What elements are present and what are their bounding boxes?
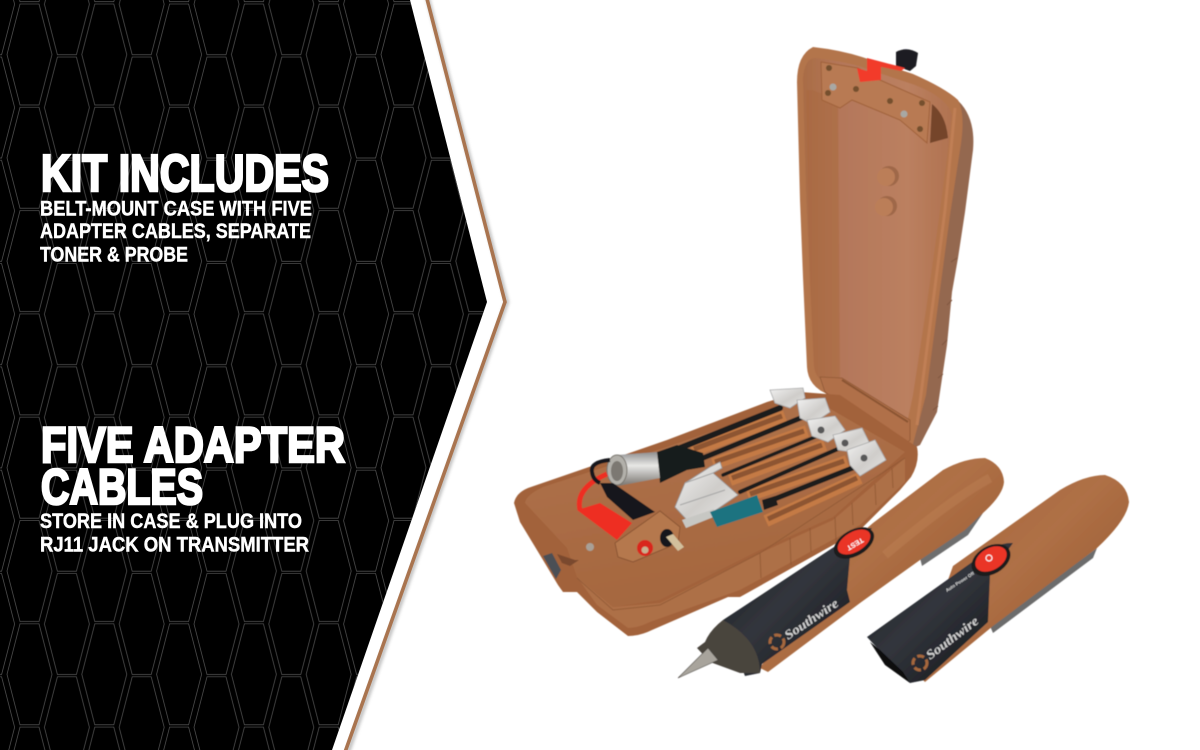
transmitter brand: Southwire	[923, 613, 982, 662]
text: five adapter cables description: RJ11 JACK ON TRANSMITTER	[40, 534, 309, 556]
test button: TEST	[845, 536, 864, 551]
heading: five adapter cables	[41, 417, 345, 515]
probe brown body	[760, 458, 1004, 672]
base ribs	[577, 458, 905, 610]
lid rim right	[917, 108, 955, 425]
transmitter underside	[990, 548, 1097, 633]
product photo: tester kit	[514, 47, 1129, 683]
test button	[828, 521, 880, 565]
lid shell	[797, 47, 963, 448]
lid inner face	[803, 58, 952, 433]
chevron shadow	[347, 0, 507, 750]
teal adapter plug	[682, 495, 778, 528]
lid of belt-mount case	[797, 47, 973, 452]
jack opening	[870, 642, 910, 683]
text: kit includes description: TONER & PROBE	[40, 244, 188, 266]
tone transmitter	[867, 475, 1129, 683]
base shell	[514, 392, 918, 636]
auto power off label: Auto Power Off	[945, 571, 975, 593]
red and black clips	[577, 460, 655, 540]
text: five adapter cables description: STORE IN CASE & PLUG INTO	[40, 510, 302, 533]
large clear RJ connector	[675, 462, 738, 520]
lid inner shade	[806, 90, 840, 383]
screws and holes	[825, 65, 925, 132]
panel: black chevron background	[0, 0, 487, 750]
lid pegs	[875, 166, 899, 216]
base screw and label	[543, 543, 594, 579]
red slider	[857, 58, 905, 82]
terminal block	[615, 511, 684, 562]
base front wall highlight	[577, 458, 905, 628]
text: kit includes description: ADAPTER CABLES, SEPARATE	[40, 220, 311, 243]
text: kit includes description: BELT-MOUNT CASE WITH FIVE	[40, 198, 312, 220]
clear RJ connectors row	[770, 388, 886, 476]
transmitter logo	[913, 656, 927, 670]
probe brand: Southwire	[781, 595, 841, 642]
probe shadow underside	[920, 513, 983, 566]
case base	[514, 392, 918, 636]
text: kit includes description	[40, 198, 312, 266]
heading: five adapter cables: FIVE ADAPTER	[41, 417, 345, 473]
probe grip highlight	[885, 478, 990, 555]
hinge	[820, 377, 910, 446]
lid rib lines	[933, 258, 957, 410]
power button	[966, 537, 1016, 583]
brown chevron line	[344, 0, 505, 750]
base inner floor	[525, 400, 905, 607]
probe logo	[770, 635, 784, 649]
heading: five adapter cables: CABLES	[41, 459, 203, 515]
text: five adapter cables description	[40, 510, 309, 556]
dark pocket in lid corner	[930, 104, 948, 143]
transmitter brown body	[915, 475, 1129, 682]
lid outer ribbed back	[880, 98, 973, 452]
probe black sleeve	[723, 528, 872, 676]
adapter wires	[680, 408, 860, 502]
adapter storage slots	[692, 416, 860, 521]
tone probe	[678, 458, 1004, 678]
probe translucent nose	[697, 620, 760, 673]
heading: kit includes: KIT INCLUDES	[41, 145, 329, 203]
lid top plate	[821, 62, 930, 143]
transmitter black sleeve	[867, 543, 1013, 683]
coax connector	[607, 445, 705, 486]
black knob	[896, 49, 918, 71]
probe metal tip	[678, 648, 718, 678]
